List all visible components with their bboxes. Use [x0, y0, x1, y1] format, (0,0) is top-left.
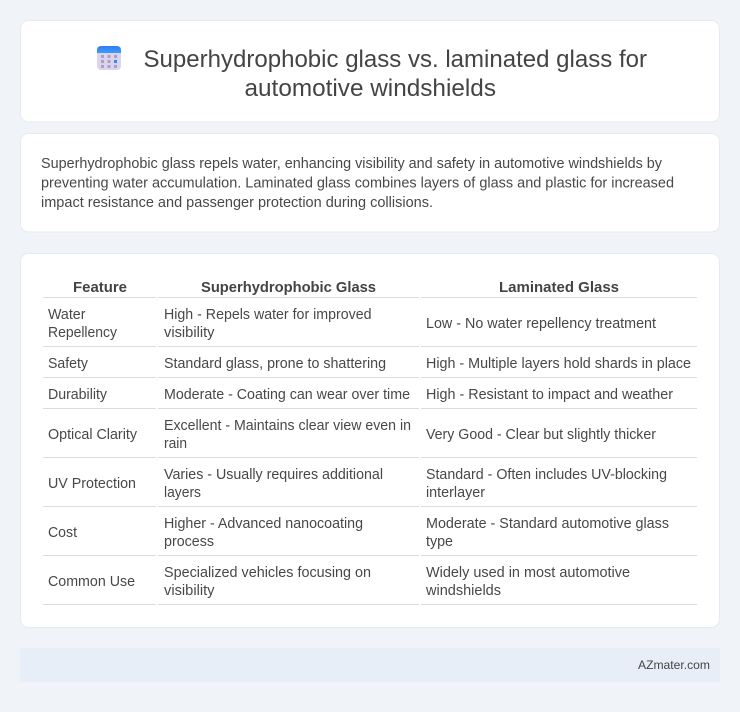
icon: calendar	[97, 46, 121, 70]
row: cost	[48, 516, 669, 550]
footer: AZmater.com	[638, 658, 710, 672]
panel: summary	[20, 134, 720, 232]
row: water repellency: visibility	[164, 325, 215, 341]
row: safety	[48, 356, 691, 372]
row: water repellency: Repellency	[48, 325, 118, 341]
row: optical clarity: Very Good - Clear but slightly thicker	[426, 427, 656, 443]
row: common use: Widely used in most automotive	[426, 565, 630, 581]
title	[144, 46, 647, 102]
table header: Laminated Glass	[499, 279, 619, 296]
row: water repellency: High - Repels water for improved	[164, 307, 372, 323]
row: optical clarity	[48, 418, 656, 452]
row: water repellency: Water	[48, 307, 86, 323]
row: water repellency	[48, 307, 656, 341]
summary text	[41, 156, 674, 211]
summary text: preventing water accumulation. Laminated glass combines layers of glass and plastic for increased	[41, 176, 674, 192]
row: uv protection: Standard - Often includes UV-blocking	[426, 467, 667, 483]
row: cost: Cost	[48, 525, 77, 541]
title: automotive windshields	[244, 75, 496, 102]
row: safety: Standard glass, prone to shattering	[164, 356, 386, 372]
row: common use: Specialized vehicles focusing on	[164, 565, 371, 581]
row: uv protection: UV Protection	[48, 476, 136, 492]
table header: Superhydrophobic Glass	[201, 279, 376, 296]
row: durability: Moderate - Coating can wear over time	[164, 387, 410, 403]
row: common use: visibility	[164, 583, 215, 599]
row: durability: High - Resistant to impact and weather	[426, 387, 673, 403]
row: common use: windshields	[425, 583, 501, 599]
panel: comparison table	[20, 254, 720, 628]
table header: Feature	[73, 279, 127, 296]
row: cost: Higher - Advanced nanocoating	[164, 516, 363, 532]
row: cost: type	[426, 534, 453, 550]
row: cost: process	[164, 534, 214, 550]
row: uv protection: interlayer	[426, 485, 485, 501]
row: common use: Common Use	[48, 574, 135, 590]
panel: title card	[20, 20, 720, 122]
row: uv protection: Varies - Usually requires additional	[164, 467, 383, 483]
row: water repellency: Low - No water repellency treatment	[426, 316, 656, 332]
row: optical clarity: rain	[164, 436, 187, 452]
row: uv protection	[48, 467, 667, 501]
row: safety: Safety	[48, 356, 89, 372]
row: optical clarity: Optical Clarity	[48, 427, 138, 443]
row: durability	[48, 387, 673, 403]
row: optical clarity: Excellent - Maintains clear view even in	[164, 418, 411, 434]
summary text: Superhydrophobic glass repels water, enhancing visibility and safety in automotive windshields by	[41, 156, 663, 172]
summary text: impact resistance and passenger protection during collisions.	[41, 195, 433, 211]
table header	[73, 279, 619, 296]
footer	[20, 648, 720, 682]
row: durability: Durability	[48, 387, 108, 403]
row: common use	[48, 565, 630, 599]
row: safety: High - Multiple layers hold shards in place	[426, 356, 691, 372]
row: cost: Moderate - Standard automotive glass	[426, 516, 669, 532]
title: Superhydrophobic glass vs. laminated glass for	[144, 46, 647, 73]
row: uv protection: layers	[164, 485, 201, 501]
